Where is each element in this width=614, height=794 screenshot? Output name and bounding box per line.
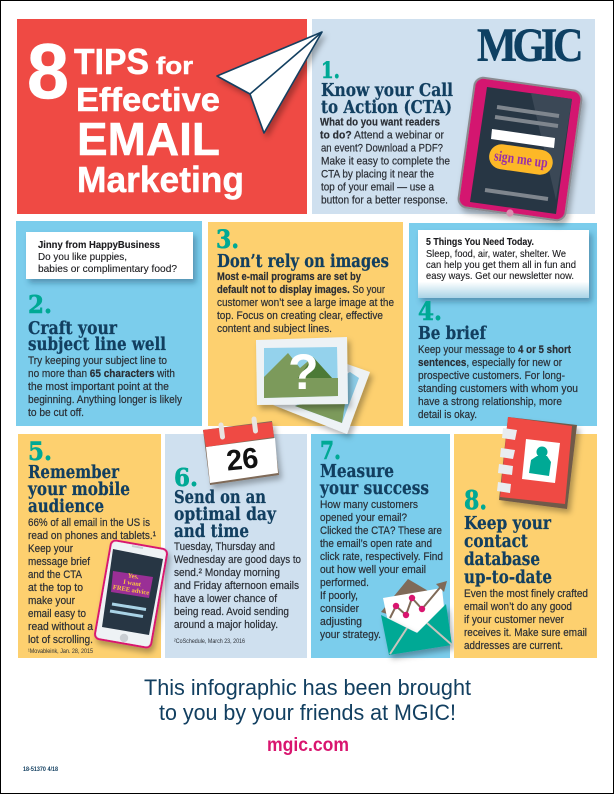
body text tip 7: How many customers bbox=[320, 499, 418, 511]
icon: contact notebook bbox=[497, 417, 577, 509]
icon: calendar showing 26: 26 bbox=[225, 442, 260, 478]
body text tip 2: no more than 65 characters with bbox=[28, 368, 175, 380]
body text tip 7: your strategy. bbox=[320, 629, 381, 641]
panel: title bbox=[17, 19, 322, 214]
body text tip 7: click rate, respectively. Find bbox=[320, 551, 443, 563]
body text tip 5: read on phones and tablets.¹ bbox=[28, 530, 156, 542]
body text tip 3: top. Focus on creating clear, effective bbox=[217, 310, 383, 322]
body text tip 7 bbox=[320, 499, 443, 641]
sample email message box bbox=[418, 230, 589, 298]
body text tip 8: if your customer never bbox=[464, 614, 564, 626]
body text tip 5: 66% of all email in the US is bbox=[28, 517, 150, 529]
body text tip 6: and Friday afternoon emails bbox=[174, 580, 299, 592]
panel: tip 1 call to action bbox=[312, 19, 595, 221]
title text: TIPS bbox=[74, 41, 149, 82]
sample email message box: 5 Things You Need Today. bbox=[426, 236, 534, 248]
footnote 1: ¹Movableink, Jan. 28, 2015 bbox=[28, 649, 94, 655]
body text tip 3: customer won’t see a large image at the bbox=[217, 297, 394, 309]
title text: Effective bbox=[76, 81, 220, 118]
body text tip 7: opened your email? bbox=[320, 512, 407, 524]
body text tip 4: have a strong relationship, more bbox=[418, 396, 562, 408]
body text tip 1: Make it easy to complete the bbox=[321, 156, 450, 168]
body text tip 6: Wednesday are good days to bbox=[174, 554, 301, 566]
body text tip 4 bbox=[418, 344, 578, 421]
number 2: 2. bbox=[28, 290, 52, 319]
body text tip 6: Tuesday, Thursday and bbox=[174, 541, 275, 553]
body text tip 2: to be cut off. bbox=[28, 407, 84, 419]
heading: don't rely on images: Don’t rely on images bbox=[217, 252, 389, 272]
body text tip 2: the most important point at the bbox=[28, 381, 169, 393]
body text tip 2: Try keeping your subject line to bbox=[28, 355, 167, 367]
number 5: 5. bbox=[28, 437, 52, 466]
body text tip 7: out how well your email bbox=[320, 564, 426, 576]
body text tip 6: being read. Avoid sending bbox=[174, 606, 289, 618]
body text tip 3 bbox=[217, 271, 394, 335]
number 4: 4. bbox=[418, 297, 442, 326]
website link: mgic.com bbox=[267, 735, 349, 756]
number 1: 1. bbox=[321, 58, 340, 84]
sample subject line box bbox=[26, 232, 193, 279]
icon: smartphone: I want bbox=[123, 579, 142, 588]
logo: MGIC: MGIC bbox=[477, 19, 581, 72]
closing message: to you by your friends at MGIC! bbox=[159, 700, 456, 725]
body text tip 6: around a major holiday. bbox=[174, 619, 278, 631]
heading: keep your contact database: contact bbox=[464, 532, 528, 552]
sample subject line box: Do you like puppies, bbox=[38, 251, 127, 263]
heading: keep your contact database: Keep your bbox=[464, 514, 552, 534]
heading: send on an optimal day: optimal day bbox=[174, 505, 277, 525]
icon: envelope with rising chart bbox=[381, 579, 452, 655]
body text tip 1: an event? Download a PDF? bbox=[321, 143, 443, 155]
number 3: 3. bbox=[216, 225, 239, 254]
body text tip 5: message brief bbox=[28, 556, 91, 568]
body text tip 5: and the CTA bbox=[28, 569, 83, 581]
body text tip 5: email easy to bbox=[28, 608, 86, 620]
heading: send on an optimal day bbox=[174, 488, 277, 542]
body text tip 1: top of your email — use a bbox=[321, 182, 435, 194]
body text tip 4: sentences, especially for new or bbox=[418, 357, 562, 369]
heading: measure your success bbox=[319, 462, 429, 499]
heading: measure your success: Measure bbox=[320, 462, 394, 482]
icon: paper airplane bbox=[217, 32, 322, 133]
title text: EMAIL bbox=[77, 113, 220, 165]
print code: 18-51370 4/18 bbox=[23, 767, 59, 773]
heading: keep your contact database: up-to-date bbox=[464, 568, 552, 588]
body text tip 3: Most e-mail programs are set by bbox=[217, 271, 362, 283]
body text tip 5 bbox=[28, 517, 156, 646]
body text tip 8 bbox=[464, 588, 588, 652]
heading: be brief: Be brief bbox=[418, 324, 487, 344]
title text bbox=[27, 27, 244, 200]
icon: smartphone: Yes. bbox=[127, 572, 140, 581]
title text: 8 bbox=[27, 27, 69, 115]
icon: photos with question mark: ? bbox=[288, 344, 319, 400]
body text tip 3: default not to display images. So your bbox=[217, 284, 385, 296]
body text tip 5: make your bbox=[28, 595, 75, 607]
body text tip 8: receives it. Make sure email bbox=[464, 627, 587, 639]
title text: for bbox=[156, 53, 193, 80]
number 6: 6. bbox=[174, 463, 198, 492]
body text tip 7: performed. bbox=[320, 577, 369, 589]
body text tip 1: CTA by placing it near the bbox=[321, 169, 434, 181]
sample email message box: easy ways. Get our newsletter now. bbox=[426, 270, 574, 282]
sample subject line box: Jinny from HappyBusiness bbox=[38, 239, 160, 251]
body text tip 1: to do? Attend a webinar or bbox=[320, 130, 444, 142]
heading: keep your contact database: database bbox=[464, 550, 540, 570]
panel: tip 5 mobile audience bbox=[18, 434, 168, 658]
heading: measure your success: your success bbox=[319, 479, 429, 499]
body text tip 8: addresses are current. bbox=[464, 640, 563, 652]
sample subject line box: babies or complimentary food? bbox=[38, 263, 177, 275]
body text tip 4: standing customers with whom you bbox=[418, 383, 578, 395]
body text tip 6: send.² Monday morning bbox=[174, 567, 280, 579]
heading: craft your subject line bbox=[28, 319, 166, 355]
heading: craft your subject line: Craft your bbox=[28, 319, 118, 339]
heading: know your CTA: to Action (CTA) bbox=[321, 98, 452, 118]
body text tip 6: have a lower chance of bbox=[174, 593, 278, 605]
body text tip 2 bbox=[28, 355, 182, 419]
sample email message box: Sleep, food, air, water, shelter. We bbox=[426, 248, 566, 260]
body text tip 1: What do you want readers bbox=[320, 117, 440, 129]
body text tip 7: If poorly, bbox=[320, 590, 358, 602]
panel: tip 8 contact database bbox=[454, 417, 597, 658]
heading: remember your mobile audience: your mobile bbox=[27, 480, 130, 500]
panel: tip 2 subject line bbox=[16, 221, 202, 426]
sample email message box: can help you get them all in fun and bbox=[426, 259, 576, 271]
heading: keep your contact database bbox=[464, 514, 552, 588]
body text tip 7: Clicked the CTA? These are bbox=[320, 525, 442, 537]
heading: remember your mobile audience: Remember bbox=[28, 463, 120, 483]
number 8: 8. bbox=[464, 486, 487, 516]
panel: tip 6 send time bbox=[165, 419, 307, 658]
body text tip 7: adjusting bbox=[320, 616, 362, 628]
body text tip 4: Keep your message to 4 or 5 short bbox=[418, 344, 571, 356]
body text tip 8: Even the most finely crafted bbox=[464, 588, 588, 600]
icon: tablet with sign me up button bbox=[457, 77, 583, 221]
body text tip 6 bbox=[174, 541, 301, 631]
title text: Marketing bbox=[77, 159, 244, 200]
icon: photos with question mark bbox=[256, 337, 370, 434]
body text tip 1 bbox=[320, 117, 450, 207]
heading: know your CTA bbox=[321, 81, 453, 118]
body text tip 8: email won’t do any good bbox=[464, 601, 572, 613]
icon: calendar showing 26 bbox=[203, 419, 279, 485]
number 7: 7. bbox=[320, 436, 341, 465]
body text tip 5: at the top to bbox=[28, 582, 83, 594]
icon: smartphone: FREE advice bbox=[112, 584, 150, 597]
heading: send on an optimal day: and time bbox=[174, 522, 249, 542]
body text tip 3: content and subject lines. bbox=[217, 323, 332, 335]
body text tip 7: consider bbox=[320, 603, 359, 615]
heading: remember your mobile audience: audience bbox=[28, 497, 104, 517]
panel: tip 4 be brief bbox=[409, 223, 597, 426]
closing message: This infographic has been brought bbox=[144, 675, 471, 700]
heading: craft your subject line: subject line well bbox=[28, 335, 166, 355]
body text tip 5: lot of scrolling. bbox=[28, 634, 93, 646]
icon: tablet with sign me up button: sign me up bbox=[493, 148, 549, 172]
icon: smartphone bbox=[94, 540, 168, 648]
heading: send on an optimal day: Send on an bbox=[174, 488, 266, 508]
footnote 2: ²CoSchedule, March 23, 2016 bbox=[174, 639, 246, 645]
body text tip 5: Keep your bbox=[28, 543, 73, 555]
body text tip 7: the email’s open rate and bbox=[320, 538, 432, 550]
panel: tip 7 measure bbox=[311, 434, 452, 658]
panel: tip 3 images bbox=[208, 222, 403, 434]
body text tip 1: button for a better response. bbox=[321, 195, 448, 207]
body text tip 5: read without a bbox=[28, 621, 94, 633]
heading: remember your mobile audience bbox=[27, 463, 130, 517]
body text tip 4: detail is okay. bbox=[418, 409, 477, 421]
body text tip 2: beginning. Anything longer is likely bbox=[28, 394, 182, 406]
closing message bbox=[144, 675, 471, 725]
heading: know your CTA: Know your Call bbox=[321, 81, 453, 101]
body text tip 4: prospective customers. For long- bbox=[418, 370, 565, 382]
